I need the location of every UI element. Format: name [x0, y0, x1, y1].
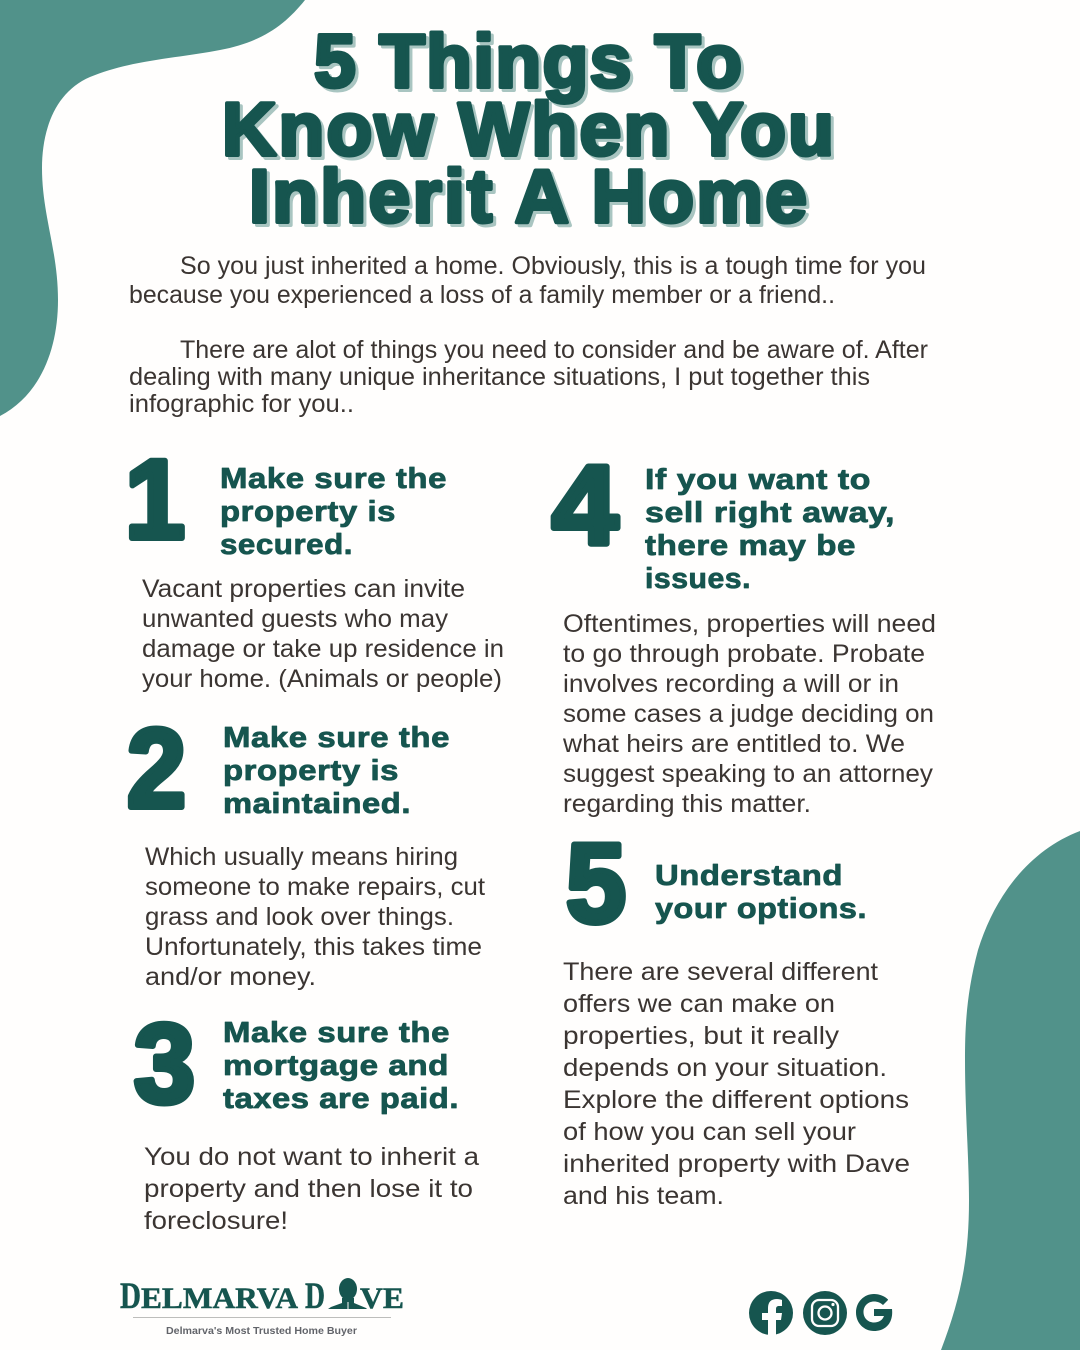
title: 5 Things To: [317, 22, 745, 106]
body 5: of how you can sell your: [563, 1118, 856, 1146]
title: [222, 19, 837, 241]
background blob: bottom right: [941, 831, 1080, 1350]
body 2: [145, 843, 485, 991]
section 1: [125, 437, 504, 693]
heading 3: Make sure the: [223, 1017, 450, 1049]
heading 2: Make sure the: [223, 722, 450, 754]
title: Know When You: [225, 90, 837, 174]
intro paragraph 2: dealing with many unique inheritance situations, I put together this: [129, 363, 870, 391]
body 4: involves recording a will or in: [563, 670, 899, 698]
logo wordmark: [120, 1276, 404, 1317]
body 5: There are several different: [563, 958, 878, 986]
section 5: [563, 821, 910, 1210]
heading 4: [645, 464, 895, 595]
body 5: offers we can make on: [563, 990, 835, 1018]
body 1: unwanted guests who may: [142, 605, 449, 633]
body 1: [142, 575, 504, 693]
heading 3: taxes are paid.: [223, 1083, 459, 1115]
icon: Google: [856, 1294, 892, 1331]
number 2: 2: [127, 706, 186, 831]
number 4: 4: [552, 443, 618, 568]
body 2: someone to make repairs, cut: [145, 873, 485, 901]
body 1: your home. (Animals or people): [142, 665, 502, 693]
heading 5: your options.: [655, 893, 867, 925]
body 3: foreclosure!: [144, 1207, 288, 1235]
body 2: Which usually means hiring: [145, 843, 458, 871]
body 1: Vacant properties can invite: [142, 575, 465, 603]
body 5: inherited property with Dave: [563, 1150, 910, 1178]
body 5: and his team.: [563, 1182, 724, 1210]
heading 3: [223, 1017, 459, 1115]
body 5: [563, 958, 910, 1210]
heading 3: mortgage and: [223, 1050, 449, 1082]
heading 2: property is: [223, 755, 399, 787]
body 1: damage or take up residence in: [142, 635, 504, 663]
title: 5 Things To: [314, 19, 742, 103]
logo silhouette: [328, 1278, 367, 1309]
logo wordmark: D: [305, 1276, 325, 1317]
number 3: 3: [134, 1001, 195, 1126]
background blob: top left: [0, 0, 305, 416]
body 4: Oftentimes, properties will need: [563, 610, 936, 638]
body 5: depends on your situation.: [563, 1054, 887, 1082]
heading 5: [655, 860, 867, 925]
logo tagline: Delmarva's Most Trusted Home Buyer: [166, 1325, 357, 1337]
section 2: [127, 706, 485, 991]
section 4: [552, 443, 936, 818]
title: Know When You: [222, 87, 834, 171]
intro paragraph 1: because you experienced a loss of a family member or a friend..: [129, 281, 835, 309]
body 4: some cases a judge deciding on: [563, 700, 934, 728]
body 3: [144, 1143, 479, 1235]
body 3: You do not want to inherit a: [144, 1143, 479, 1171]
heading 5: Understand: [655, 860, 843, 892]
logo wordmark: D: [120, 1276, 141, 1317]
body 2: grass and look over things.: [145, 903, 454, 931]
logo wordmark: VE: [360, 1282, 404, 1315]
number 5: 5: [566, 821, 626, 946]
heading 1: secured.: [220, 529, 353, 561]
body 4: suggest speaking to an attorney: [563, 760, 934, 788]
icon: Instagram: [803, 1291, 847, 1335]
heading 2: [223, 722, 450, 820]
heading 4: If you want to: [645, 464, 871, 496]
title: Inherit A Home: [249, 154, 807, 238]
logo: Delmarva Dave: [120, 1276, 404, 1337]
body 2: Unfortunately, this takes time: [145, 933, 482, 961]
body 4: what heirs are entitled to. We: [562, 730, 905, 758]
body 4: regarding this matter.: [563, 790, 811, 818]
heading 1: property is: [220, 496, 396, 528]
title: Inherit A Home: [252, 157, 810, 241]
heading 4: there may be: [645, 530, 856, 562]
intro paragraph 2: There are alot of things you need to consider and be aware of. After: [180, 336, 928, 364]
section 3: [134, 1001, 479, 1235]
body 3: property and then lose it to: [144, 1175, 473, 1203]
icon: Facebook: [749, 1291, 793, 1335]
heading 1: [220, 463, 447, 561]
heading 4: issues.: [645, 563, 751, 595]
body 2: and/or money.: [145, 963, 316, 991]
intro paragraph 1: So you just inherited a home. Obviously, this is a tough time for you: [180, 252, 926, 280]
intro paragraph 2: [129, 336, 928, 418]
heading 2: maintained.: [223, 788, 411, 820]
body 5: properties, but it really: [563, 1022, 840, 1050]
intro paragraph 1: [129, 252, 926, 309]
heading 1: Make sure the: [220, 463, 447, 495]
number 1: 1: [125, 437, 185, 562]
body 4: [562, 610, 936, 818]
logo divider: [133, 1317, 391, 1318]
intro paragraph 2: infographic for you..: [129, 390, 354, 418]
body 5: Explore the different options: [563, 1086, 909, 1114]
body 4: to go through probate. Probate: [563, 640, 925, 668]
logo wordmark: ELMARVA: [141, 1282, 298, 1315]
heading 4: sell right away,: [645, 497, 895, 529]
